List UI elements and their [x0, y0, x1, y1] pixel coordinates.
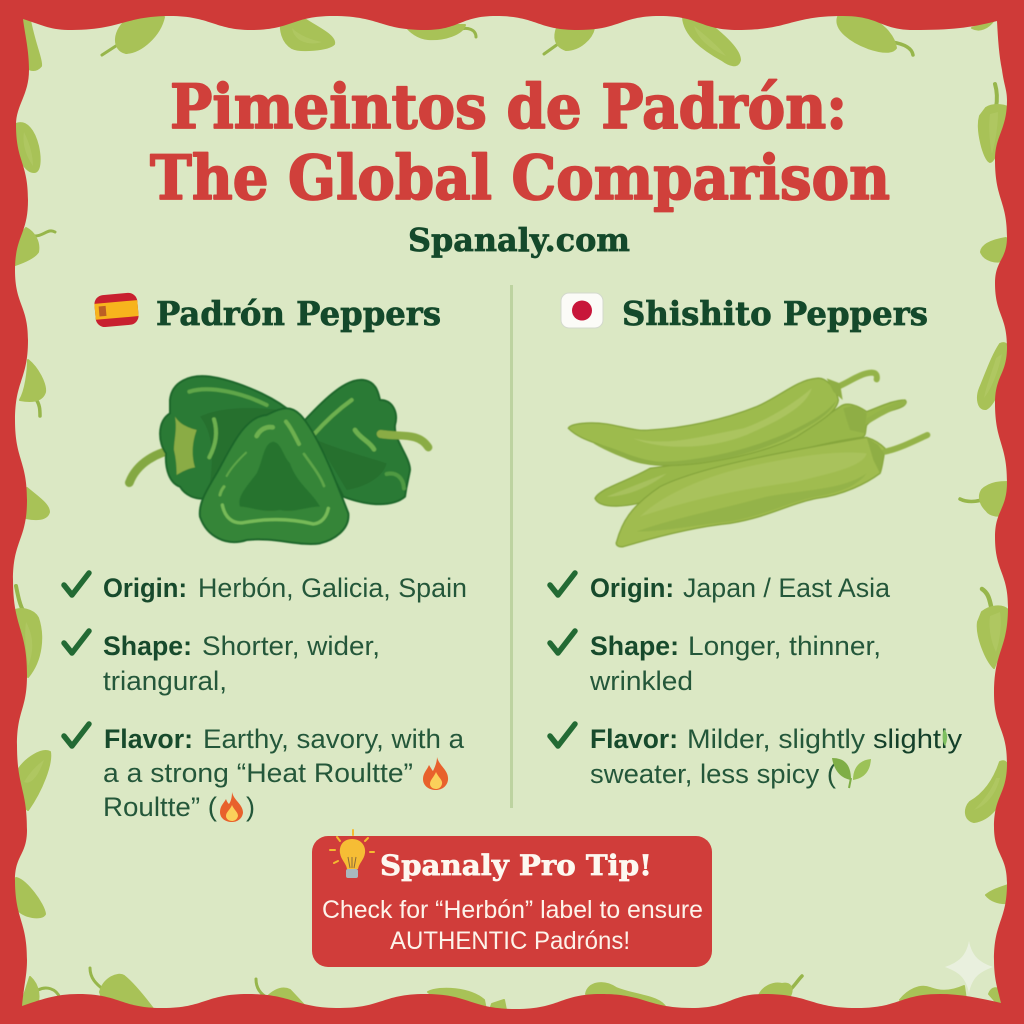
fact list: Padrón [64, 573, 467, 822]
fact: shape: Shape: [103, 631, 192, 661]
fact: flavor: slightly [873, 724, 963, 754]
icon: leaf sprout [832, 758, 871, 788]
pepper right t [978, 589, 1008, 668]
pepper bottom corner right [989, 988, 1002, 1004]
pepper bottom n [900, 986, 966, 1000]
flag: Spain [94, 292, 139, 328]
icon: light bulb [330, 830, 374, 878]
fact: origin [64, 573, 467, 603]
fact: shape: triangural, [103, 666, 227, 696]
fact: flavor: Earthy, savory, with a [203, 724, 465, 754]
heading: Padrón Peppers: Padrón Peppers [156, 294, 441, 333]
pepper left g [16, 878, 45, 917]
fact: shape [64, 631, 380, 696]
pepper top 3 [405, 25, 476, 39]
icon: flame 1 [423, 757, 448, 790]
fact: origin: Origin: [590, 573, 674, 603]
sparkle watermark [945, 941, 993, 993]
fact: shape: Shorter, wider, [202, 631, 380, 661]
pepper left e [12, 586, 41, 677]
fact: shape: wrinkled [589, 666, 693, 696]
fact: shape [550, 631, 881, 696]
fact: flavor: Roultte” ( [103, 792, 217, 822]
pepper left f [15, 751, 50, 810]
fact: origin: Origin: [103, 573, 187, 603]
fact: flavor [550, 724, 963, 789]
pepper bottom k [428, 989, 506, 1010]
icon: flame 2 [220, 792, 243, 822]
pepper right p [979, 84, 1010, 162]
callout heading: Spanaly Pro Tip! [380, 849, 652, 882]
pepper top 6 [837, 17, 913, 55]
fact: shape: Longer, thinner, [688, 631, 881, 661]
pepper right u [966, 761, 1009, 822]
fact: flavor [64, 724, 465, 822]
fact: flavor: Milder, slightly [687, 724, 866, 754]
fact list: Shishito [550, 573, 963, 789]
pepper bottom corner left [20, 977, 60, 1008]
pepper right v [986, 885, 1008, 903]
column divider [510, 285, 513, 808]
fact: flavor: sweater, less spicy ( [590, 759, 836, 789]
pepper corner top left [22, 18, 41, 70]
pepper top 1 [102, 17, 164, 55]
illustration: Padrón peppers [129, 376, 428, 544]
title [150, 72, 890, 214]
heading: Shishito Peppers: Shishito Peppers [622, 294, 928, 333]
callout text [322, 896, 703, 955]
pepper top 2 [281, 20, 334, 50]
title line 2: The Global Comparison [150, 143, 890, 214]
flag: Japan [561, 293, 603, 328]
pepper right r [978, 343, 1009, 409]
fact: flavor: ) [246, 792, 255, 822]
title line 1: Pimeintos de Padrón: [170, 72, 847, 143]
pepper left d [26, 488, 49, 519]
pepper right s [960, 482, 1008, 516]
pepper bottom m [758, 976, 802, 998]
panel: Padrón peppers [64, 292, 467, 822]
pepper left b [15, 228, 55, 265]
pepper top 5 [683, 17, 740, 65]
fact: flavor: Flavor: [590, 724, 678, 754]
fact: origin [550, 573, 891, 603]
callout: Spanaly Pro Tip [312, 830, 712, 967]
callout text: AUTHENTIC Padróns! [390, 927, 630, 955]
illustration: Shishito peppers [568, 373, 927, 547]
panel: Shishito peppers [550, 293, 963, 789]
pepper top 4 [544, 28, 594, 54]
pepper left a [16, 123, 40, 172]
icon: glitch leaf mark [943, 729, 947, 746]
fact: flavor: Flavor: [104, 724, 193, 754]
fact: shape: Shape: [590, 631, 679, 661]
pepper bottom j [256, 979, 305, 1006]
pepper top 7 [972, 20, 994, 30]
fact: origin: Japan / East Asia [683, 573, 891, 603]
fact: origin: Herbón, Galicia, Spain [198, 573, 467, 603]
pepper bottom l [586, 983, 666, 1008]
callout text: Check for “Herbón” label to ensure [322, 896, 703, 924]
website subtitle: Spanaly.com [408, 221, 630, 259]
pepper right q [981, 238, 1006, 262]
pepper bottom i [90, 968, 154, 1010]
pepper left c [20, 360, 45, 416]
fact: flavor: a a strong “Heat Roultte” [103, 758, 413, 788]
